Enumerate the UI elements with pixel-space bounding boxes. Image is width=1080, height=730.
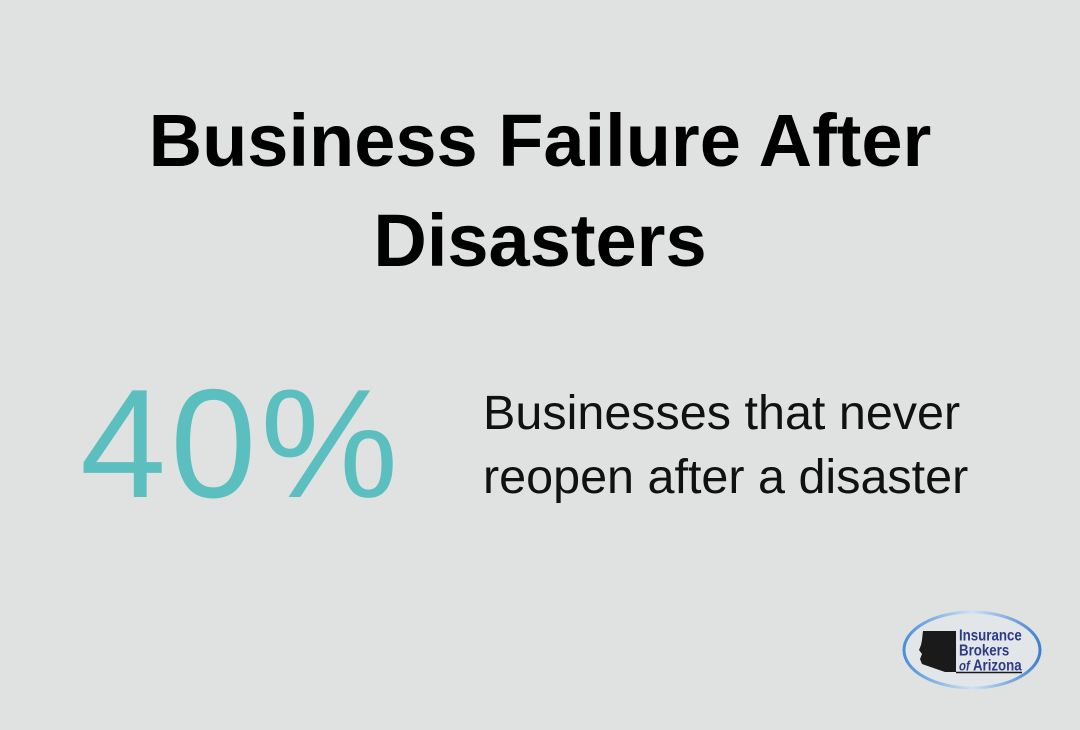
stat description: reopen after a disaster <box>483 450 968 504</box>
logo text <box>959 627 1022 675</box>
logo text: Brokers <box>959 642 1009 660</box>
stat number: 40% <box>80 357 402 530</box>
title: Disasters <box>373 199 707 282</box>
title <box>149 99 931 282</box>
stat description <box>483 386 968 504</box>
icon: arizona outline <box>919 631 956 672</box>
logo <box>902 610 1042 690</box>
logo text: of Arizona <box>959 657 1022 675</box>
title: Business Failure After <box>149 99 931 182</box>
stat description: Businesses that never <box>483 386 960 440</box>
logo text: Insurance <box>959 627 1022 645</box>
